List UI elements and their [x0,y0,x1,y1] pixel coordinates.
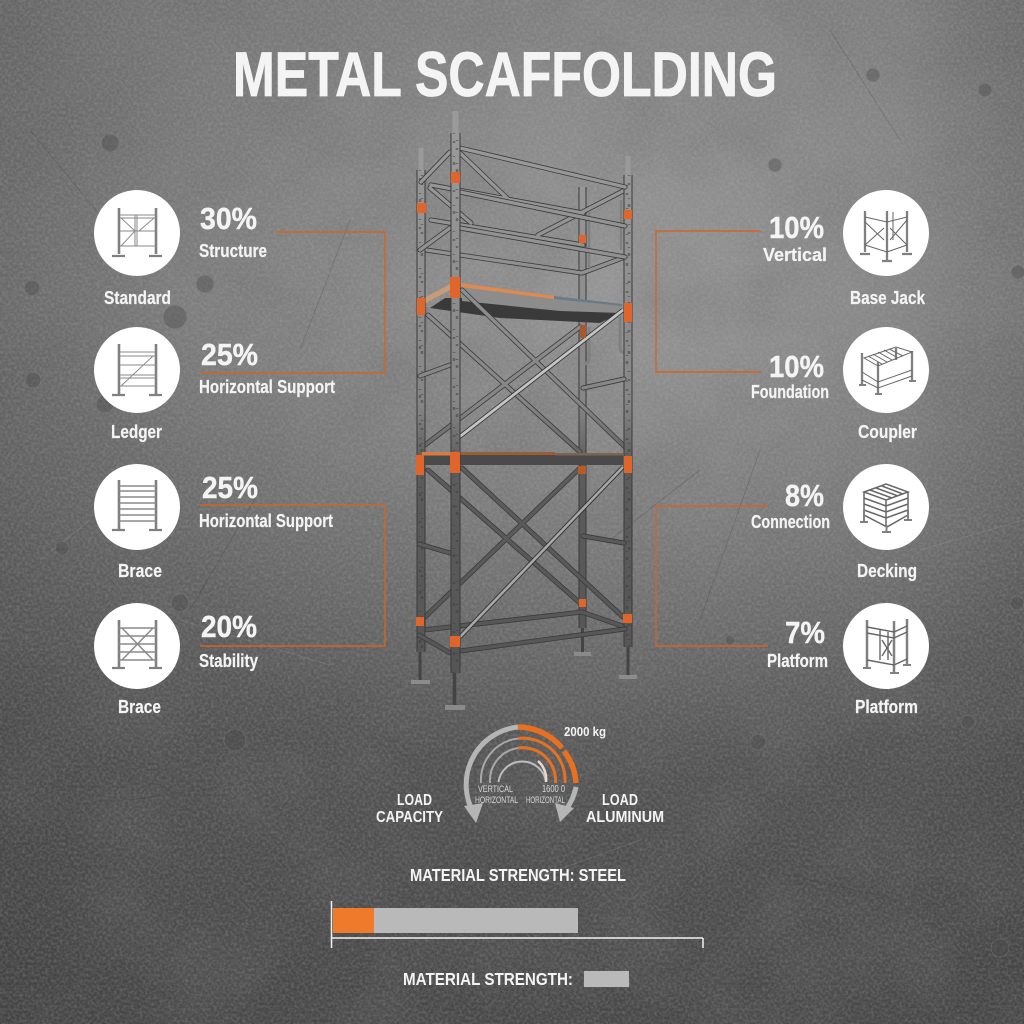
right connector: vertical to foundation [656,231,761,372]
item: brace 20% stability [94,603,258,717]
item: coupler 10% foundation [751,327,929,442]
illustration: metal scaffolding tower [411,111,637,710]
gauge arcs [464,727,576,823]
material strength legend: MATERIAL STRENGTH: [403,969,573,989]
percentage: 20% [201,609,257,644]
percentage: 8% [785,478,824,513]
icon: ledger frame [94,327,180,413]
label: load aluminum: ALUMINUM [586,809,664,826]
material strength heading: steel: MATERIAL STRENGTH: STEEL [410,865,626,885]
icon: coupler platform frame [843,327,929,413]
component name: Brace [118,697,161,717]
percentage: 10% [769,349,824,384]
inner labels: VERTICAL [478,784,513,794]
icon: cross brace frame [94,603,180,689]
percentage: 25% [202,470,258,505]
left and right posts [411,148,637,684]
cross braces [425,290,625,637]
item: standard 30% structure [94,190,267,308]
item: brace 25% horizontal support [94,464,333,581]
upper deck platform [424,283,622,323]
label: load capacity: CAPACITY [376,809,443,826]
inner labels: HORIZONTAL [475,795,518,805]
description: Connection [751,512,830,532]
title: METAL SCAFFOLDING [233,40,777,110]
inner labels: HORIZONTAL [526,795,565,805]
component name: Base Jack [850,288,926,308]
component name: Brace [118,561,162,581]
item: platform 7% platform [767,603,929,717]
percentage: 25% [201,337,258,372]
description: Foundation [751,382,829,402]
right connector: connection to platform [656,506,768,646]
label: load aluminum: LOAD [602,792,638,809]
label: load aluminum [586,792,664,826]
left connector: structure to horizontal support [201,232,385,373]
horizontal ledgers [419,148,625,653]
back rails and braces [420,153,625,630]
left connector: horizontal support to stability [200,505,385,646]
component name: Ledger [111,422,162,442]
icon: platform tower [843,603,929,689]
description: Stability [199,651,258,671]
icon: brace ladder frame [94,464,180,550]
description: Structure [199,241,267,261]
orange couplers [416,172,632,647]
icon: base jack frame [843,190,929,276]
bar chart: material strength [331,901,703,948]
component name: Decking [857,561,917,581]
description: Horizontal Support [199,511,333,531]
percentage: 30% [200,201,257,236]
description: Vertical [763,245,827,265]
description: Horizontal Support [199,377,335,397]
component name: Platform [855,697,918,717]
label: load capacity [376,792,443,826]
icon: standard frame [94,190,180,276]
item: base jack 10% vertical [763,190,929,308]
item: ledger 25% horizontal support [94,327,335,442]
component name: Coupler [858,422,917,442]
item: decking 8% connection [751,464,929,581]
back post [574,187,591,656]
lower deck beam [422,452,623,465]
percentage: 7% [785,615,825,650]
inner labels [475,784,565,805]
component name: Standard [104,288,171,308]
description: Platform [767,651,828,671]
value: 2000 kg: 2000 kg [564,725,606,739]
label: load capacity: LOAD [397,792,432,809]
load capacity gauge [376,725,664,826]
front post [445,111,465,710]
percentage: 10% [769,210,824,245]
inner labels: 1600 0 [542,784,565,795]
icon: stacked decking [843,464,929,550]
